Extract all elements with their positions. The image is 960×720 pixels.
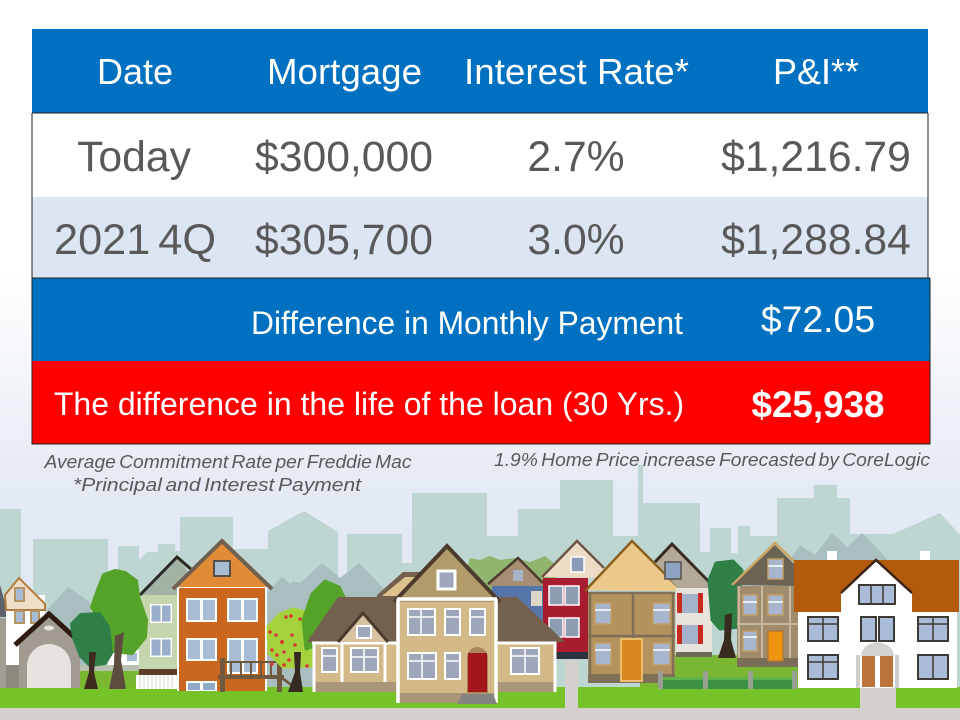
back lawn xyxy=(70,670,180,690)
house: large white house xyxy=(794,551,959,688)
light green tree xyxy=(92,571,146,653)
white picket fence xyxy=(136,675,177,689)
row: 2021 4Q: 3.0% xyxy=(527,216,625,264)
front lawn xyxy=(0,687,960,708)
row: today xyxy=(32,113,928,197)
flowering bush and tree xyxy=(268,581,344,692)
row: lifetime difference: The difference in the life of the loan (30 Yrs.) xyxy=(54,386,684,422)
road xyxy=(0,708,960,720)
wooden porch xyxy=(218,658,303,692)
house: main tan house xyxy=(307,546,565,704)
row: today: $300,000 xyxy=(255,133,433,181)
row: today: $1,216.79 xyxy=(721,133,911,181)
footnote: rate source xyxy=(43,451,412,495)
house: tan two-storey house xyxy=(585,541,682,683)
house: white house behind garage xyxy=(5,578,45,665)
row: 2021 4Q xyxy=(32,197,928,278)
header row xyxy=(32,29,928,113)
footnote: rate source: *Principal and Interest Payment xyxy=(73,474,362,495)
row: today: Today xyxy=(77,133,192,181)
row: monthly difference: $72.05 xyxy=(761,298,875,340)
house: slate house far left xyxy=(0,585,20,688)
garage xyxy=(15,614,83,688)
distant grey hills xyxy=(30,533,890,700)
header row: Date xyxy=(97,51,173,92)
row: 2021 4Q: 2021 4Q xyxy=(54,216,216,264)
trees left xyxy=(72,571,146,689)
row: lifetime difference xyxy=(32,361,930,444)
footnote: rate source: Average Commitment Rate per Freddie Mac xyxy=(43,451,412,472)
hedge with bollards xyxy=(658,671,797,689)
header row: Interest Rate* xyxy=(464,51,689,92)
house: striped house with red shutters xyxy=(655,544,715,657)
row: 2021 4Q: $1,288.84 xyxy=(721,216,911,264)
far back trees xyxy=(465,556,556,590)
row: today: 2.7% xyxy=(527,133,625,181)
header row: P&I** xyxy=(773,51,859,92)
dark green tree xyxy=(72,614,111,665)
footnote: home price forecast: 1.9% Home Price increase Forecasted by CoreLogic xyxy=(494,449,931,470)
city skyline xyxy=(0,465,960,700)
neighborhood illustration xyxy=(0,465,960,720)
row: 2021 4Q: $305,700 xyxy=(255,216,433,264)
small white wall behind trees xyxy=(80,650,140,671)
row: lifetime difference: $25,938 xyxy=(752,383,884,425)
house: orange house xyxy=(173,541,272,691)
header row: Mortgage xyxy=(267,51,422,92)
row: monthly difference: Difference in Monthly Payment xyxy=(251,305,683,341)
dark green tree xyxy=(709,561,742,658)
house: red house xyxy=(542,541,605,659)
row: monthly difference xyxy=(32,278,930,361)
house: brown house with orange door xyxy=(732,543,798,667)
garden paths xyxy=(565,660,896,708)
house: blue house behind xyxy=(488,558,543,635)
mortgage table xyxy=(32,29,930,444)
house: green house xyxy=(139,556,192,675)
